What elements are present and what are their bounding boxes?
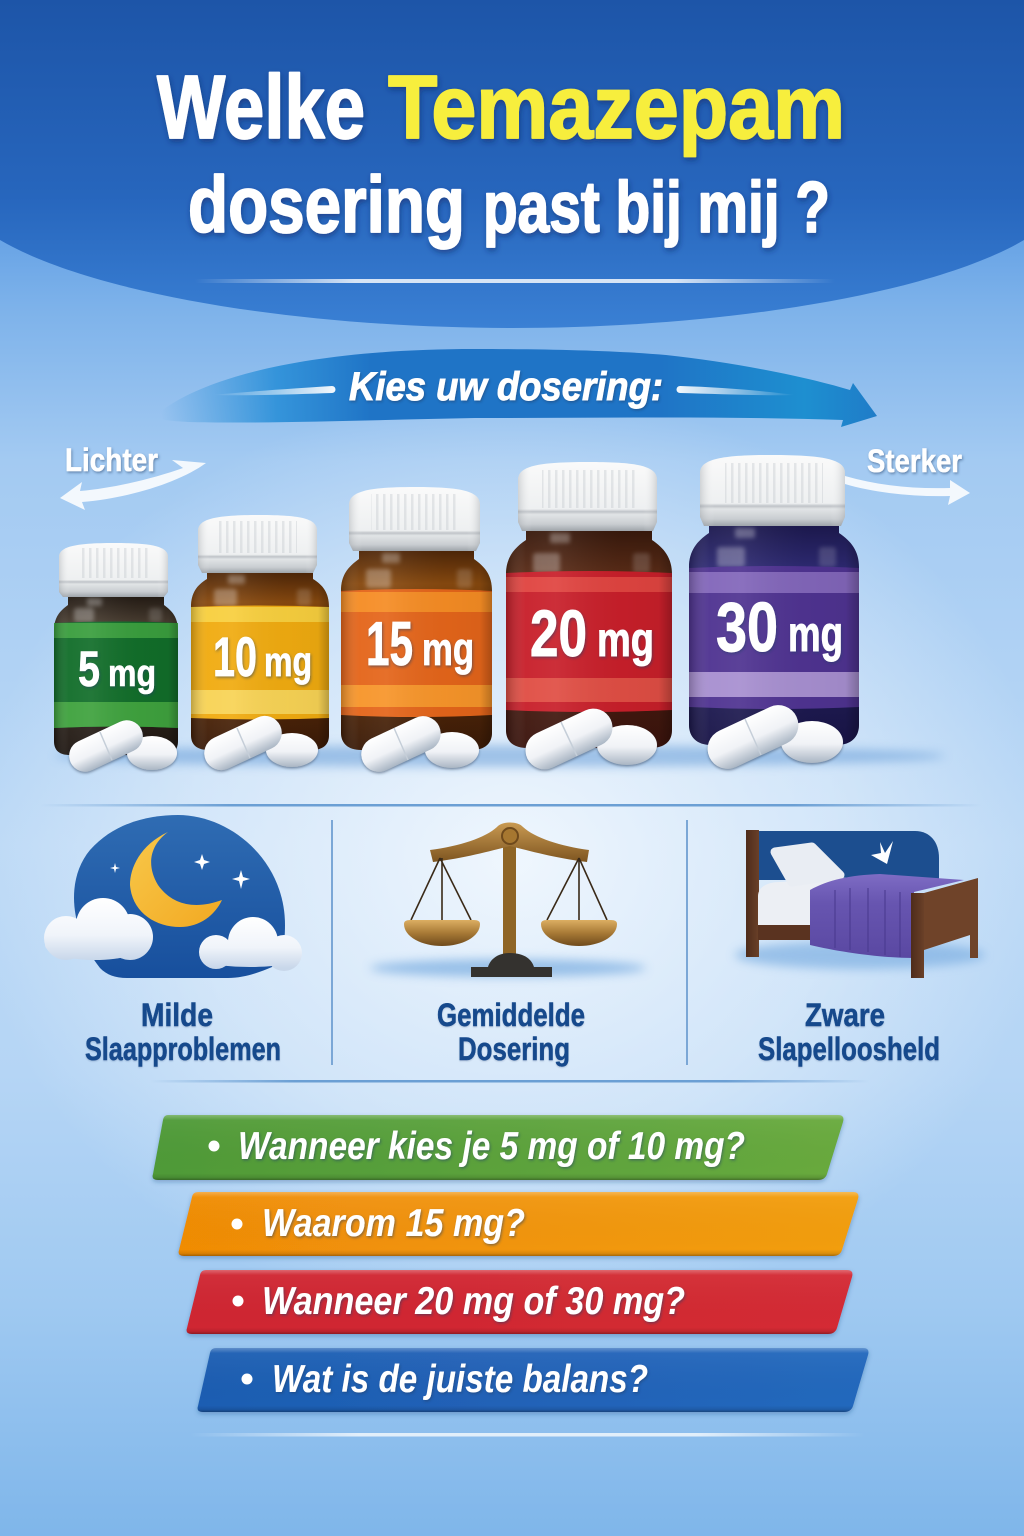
bar: 20 mg or 30 mg: Wanneer 20 mg of 30 mg? xyxy=(262,1280,685,1323)
title: past bij mij ? xyxy=(483,168,830,248)
bottle: 20 mg xyxy=(506,462,672,776)
bottle: 5 mg xyxy=(54,543,178,777)
label: Zware Slapeloosheid: Slapelloosheld xyxy=(758,1031,940,1067)
title: Temazepam xyxy=(388,58,845,158)
label text: mg xyxy=(108,653,156,695)
bar: 5 mg or 10 mg: Wanneer kies je 5 mg of 10 mg? xyxy=(238,1125,745,1168)
dosage arrow banner xyxy=(154,349,877,427)
pills xyxy=(356,710,479,778)
pills xyxy=(199,710,318,776)
label text: mg xyxy=(788,606,843,662)
label text xyxy=(78,641,156,697)
bottle: 10 mg xyxy=(191,515,329,776)
label text: mg xyxy=(422,623,474,675)
bar: 20 mg or 30 mg xyxy=(187,1270,852,1334)
label: Zware Slapeloosheid xyxy=(758,997,940,1067)
label text: 10 xyxy=(213,625,257,688)
stronger label and arrow xyxy=(845,443,970,505)
label: Zware Slapeloosheid: Zware xyxy=(805,997,885,1033)
label text xyxy=(530,596,654,670)
bar: 5 mg or 10 mg xyxy=(153,1115,843,1180)
title: dosering xyxy=(188,160,465,249)
title: Welke xyxy=(157,58,365,158)
lighter label and arrow: Lichter xyxy=(65,442,158,478)
icon: bed xyxy=(735,830,985,978)
bar: 15 mg xyxy=(179,1192,858,1256)
lighter label and arrow xyxy=(60,442,206,510)
label text: mg xyxy=(264,638,312,685)
stronger label and arrow: Sterker xyxy=(867,443,962,479)
table shadow xyxy=(55,745,945,767)
label: Gemiddelde Dosering: Gemiddelde xyxy=(437,997,585,1033)
bottle: 15 mg xyxy=(341,487,492,778)
bar: 15 mg: Waarom 15 mg? xyxy=(262,1202,525,1245)
pills xyxy=(64,715,177,777)
label text: 20 xyxy=(530,596,587,670)
label: Milde Slaapproblemen: Milde xyxy=(141,997,213,1033)
title xyxy=(157,58,845,249)
icon: balance scale xyxy=(370,822,646,977)
header banner xyxy=(0,0,1024,328)
label text: 5 xyxy=(78,641,100,697)
label text: mg xyxy=(597,614,654,667)
label text xyxy=(366,610,474,679)
label: Gemiddelde Dosering xyxy=(437,997,585,1067)
label text xyxy=(213,625,312,688)
icon: moon and clouds xyxy=(44,815,302,978)
bottle: 30 mg xyxy=(689,455,859,775)
label: Milde Slaapproblemen: Slaapproblemen xyxy=(85,1031,281,1067)
label text xyxy=(716,588,843,666)
pills xyxy=(701,699,843,775)
label text: 30 xyxy=(716,588,778,666)
label: Milde Slaapproblemen xyxy=(85,997,281,1067)
bar: balance xyxy=(198,1348,868,1412)
label: Gemiddelde Dosering: Dosering xyxy=(458,1031,570,1067)
pills xyxy=(519,702,657,776)
bar: balance: Wat is de juiste balans? xyxy=(272,1358,648,1401)
banner heading: Kies uw dosering: xyxy=(349,365,663,409)
label text: 15 xyxy=(366,610,413,679)
